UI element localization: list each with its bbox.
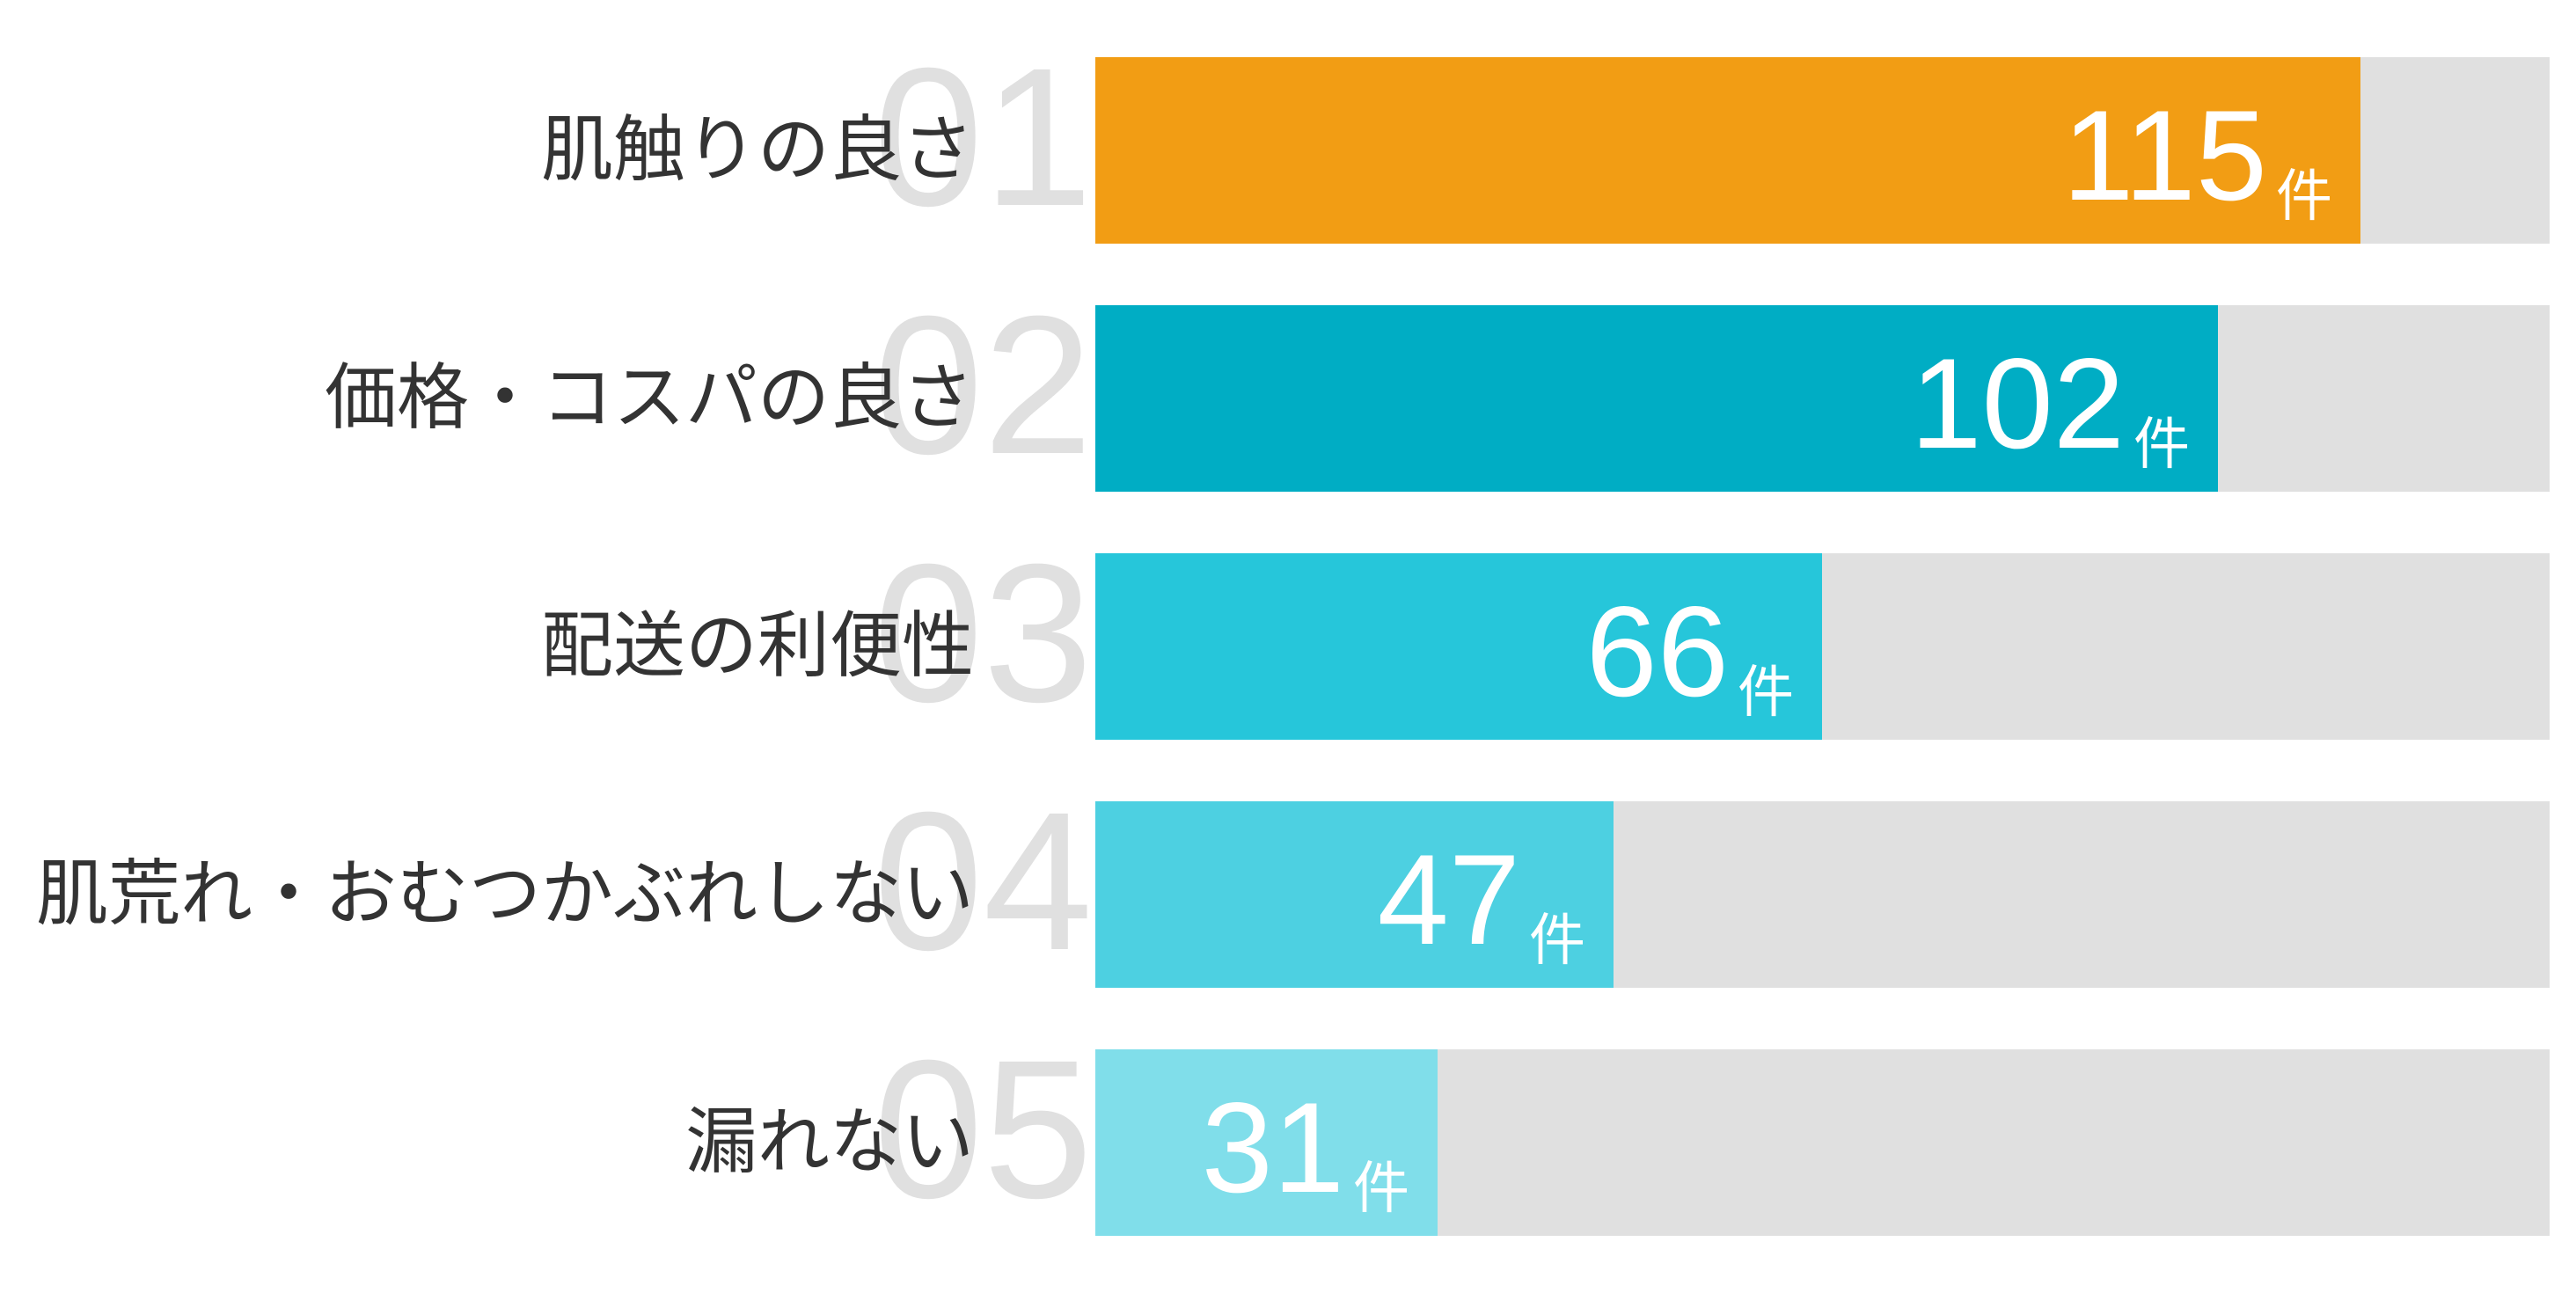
row 3: 配送の利便性	[541, 523, 2550, 743]
row 5: 漏れない	[685, 1019, 2550, 1239]
bar 115件: 115	[2062, 84, 2267, 227]
label: 配送の利便性	[541, 606, 974, 686]
bar 115件	[1095, 57, 2550, 244]
bar 31件: 件	[1353, 1157, 1409, 1220]
rank numeral 02: 02	[874, 275, 1093, 495]
bar 31件: 31	[1202, 1076, 1344, 1219]
bar 102件: 102	[1910, 332, 2125, 475]
rank numeral 05: 05	[874, 1019, 1093, 1239]
rank numeral 04: 04	[874, 771, 1093, 991]
rank numeral 01: 01	[874, 27, 1093, 247]
label: 価格・コスパの良さ	[325, 358, 974, 438]
bar 31件	[1095, 1049, 2550, 1236]
label: 肌荒れ・おむつかぶれしない	[36, 854, 974, 934]
label: 肌触りの良さ	[541, 110, 974, 190]
label: 漏れない	[685, 1102, 974, 1182]
bar 47件: 47	[1378, 828, 1520, 971]
bar 102件	[1095, 305, 2550, 492]
row 2: 価格・コスパの良さ	[325, 275, 2550, 495]
bar 66件	[1095, 553, 2550, 740]
bar 66件: 件	[1738, 661, 1794, 724]
bar 47件	[1095, 801, 2550, 988]
rank numeral 03: 03	[874, 523, 1093, 743]
row 1: 肌触りの良さ	[541, 27, 2550, 247]
bar 47件: 件	[1529, 909, 1585, 972]
bar 66件: 66	[1586, 580, 1729, 723]
row 4: 肌荒れ・おむつかぶれしない	[36, 771, 2550, 991]
bar 115件: 件	[2276, 164, 2332, 228]
bar 102件: 件	[2133, 413, 2190, 476]
